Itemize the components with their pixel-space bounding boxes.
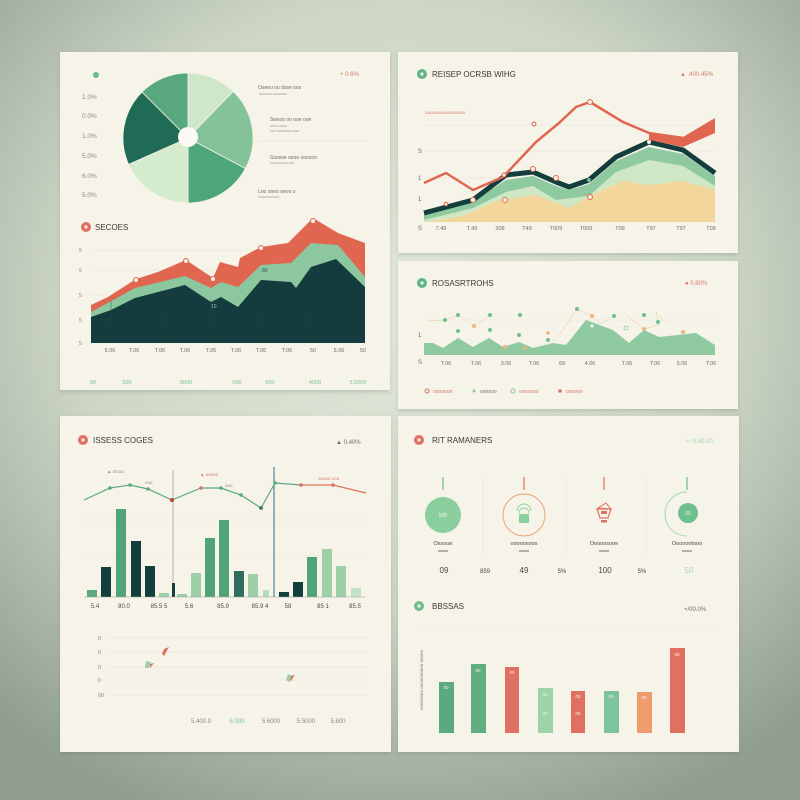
bottom labels: 5.600 <box>330 719 346 725</box>
x labels: 5.06 <box>105 348 115 354</box>
section heading: BBSSAS <box>414 601 464 611</box>
x labels: T97 <box>676 226 686 232</box>
metric numbers: 5% <box>638 569 647 575</box>
heading: ISSESS COGES <box>93 436 153 445</box>
pie legend labels: oooo oooo <box>270 124 287 128</box>
y axis label: oooooooo oooooooooo ooooo <box>419 649 424 710</box>
panel: line and area chart: oooooooooooooooo <box>425 110 466 115</box>
section heading: SECOES <box>81 222 128 232</box>
bottom labels: 5.5000 <box>297 719 316 725</box>
pie y labels: 1.0% <box>82 133 97 140</box>
panel: bar and line combo: ▲ Oooo <box>107 469 124 474</box>
bar x labels <box>91 604 361 610</box>
bar x labels: 85.5 5 <box>151 604 168 610</box>
x labels: T.06 <box>129 348 139 354</box>
pie legend labels: ooooooooooo <box>258 195 279 199</box>
panel: line and area chart: 1 <box>418 176 422 182</box>
metric 1: 505 <box>439 513 447 519</box>
bar x labels: 5.6 <box>185 604 194 610</box>
x labels: T.06 <box>282 348 292 354</box>
pie legend labels: ooooooooo ooo <box>270 161 294 165</box>
top right value: ▲ .400.45% <box>680 72 714 78</box>
top right value: + 0.6% <box>340 72 360 78</box>
y labels area: 5 <box>79 341 82 347</box>
x labels: 50 <box>360 348 366 354</box>
metric numbers <box>440 566 694 575</box>
x labels: 50 <box>310 348 316 354</box>
bottom labels: 5.400.9 <box>191 719 212 725</box>
top right value: ● 0.60% <box>685 281 708 287</box>
top right value: +/ 0.60.00 <box>686 439 714 445</box>
bottom labels: 5.000 <box>229 719 245 725</box>
lower line chart: 0 <box>98 678 101 684</box>
bar chart: 00 <box>608 694 614 699</box>
lower line chart: 0 <box>98 636 101 642</box>
panel: scatter area chart: S <box>418 360 422 366</box>
lower line chart: 00 <box>98 693 104 699</box>
bar x labels: 85 1 <box>317 604 329 610</box>
x labels: T009 <box>580 226 592 232</box>
y labels area: 5 <box>79 248 82 254</box>
pie chart <box>123 73 253 203</box>
stacked area chart <box>91 218 365 343</box>
bar chart: 00 <box>674 652 680 657</box>
bottom green labels: 500 <box>122 380 132 386</box>
markers <box>162 647 169 656</box>
green area <box>424 320 715 355</box>
pie legend labels: ooo ooooooo oooo <box>270 129 299 133</box>
x labels: T.06 <box>529 361 539 367</box>
x labels: T.06 <box>706 361 716 367</box>
pie legend labels: ooooooo ooooooo <box>259 92 287 96</box>
bar x labels: 65.9 4 <box>252 604 269 610</box>
heading <box>414 435 492 445</box>
bottom labels <box>191 719 346 725</box>
y labels area: 5 <box>79 268 82 274</box>
x labels: 4.06 <box>585 361 595 367</box>
x labels <box>441 361 716 367</box>
metric numbers: 859 <box>480 569 491 575</box>
x labels: T97 <box>646 226 656 232</box>
scatter dots <box>427 309 666 346</box>
bottom labels: 5.6000 <box>262 719 281 725</box>
bar chart: 00 <box>475 668 481 673</box>
panel: pie and area chart <box>60 52 390 390</box>
panel: bar and line combo: ooo <box>145 480 153 485</box>
x labels: T09 <box>706 226 716 232</box>
bottom green labels: 600 <box>265 380 275 386</box>
panel: line and area chart: 1 <box>418 197 422 203</box>
pie y labels: 1.0% <box>82 94 97 101</box>
panel: scatter area chart: 1 <box>418 333 422 339</box>
x labels: T.06 <box>471 361 481 367</box>
metric numbers: 100 <box>598 566 612 575</box>
pie y labels: 5.0% <box>82 192 97 199</box>
lower line chart <box>98 636 368 699</box>
metric numbers: 5% <box>558 569 567 575</box>
metric 3 <box>590 477 618 551</box>
metric numbers: 09 <box>440 566 449 575</box>
panel: bar and line combo: ooo <box>225 483 233 488</box>
heading: ROSASRTROHS <box>432 279 494 288</box>
bar chart: 00 <box>509 670 515 675</box>
dark line <box>424 142 715 213</box>
bar x labels: 58 <box>285 604 292 610</box>
bar x labels: 85.5 <box>349 604 361 610</box>
panel: metrics and bars: +/00.0% <box>684 607 707 613</box>
x labels: T.06 <box>622 361 632 367</box>
panel: metrics and bars <box>398 416 739 752</box>
stacked area chart: 10 <box>211 304 217 310</box>
metric 1 <box>425 477 461 551</box>
x labels: 5.06 <box>677 361 687 367</box>
bar x labels: 85.9 <box>217 604 229 610</box>
x labels: T.06 <box>650 361 660 367</box>
pie legend labels: Ssosoe oeoo ooosoo <box>270 155 317 161</box>
lower line chart: 0 <box>98 650 101 656</box>
bar chart: 00 <box>575 694 581 699</box>
pie y labels: 0.0% <box>82 113 97 120</box>
x labels: 7.49 <box>436 226 446 232</box>
bar chart <box>439 648 685 733</box>
panel: bar and line combo: ▲ ooooo <box>200 472 219 477</box>
bottom green labels: 500 <box>232 380 242 386</box>
bar x labels: 80.0 <box>118 604 130 610</box>
bottom green labels: 4000 <box>309 380 321 386</box>
legend: oooooo <box>566 389 583 395</box>
x labels: T.06 <box>180 348 190 354</box>
panel: bar and line combo <box>60 416 391 752</box>
x labels: 309 <box>495 226 505 232</box>
y labels area: 5 <box>79 318 82 324</box>
pie y labels <box>82 94 97 199</box>
bar chart: 00 <box>542 711 548 716</box>
pie legend labels <box>258 85 317 199</box>
x labels: T49 <box>522 226 532 232</box>
x labels <box>436 226 716 232</box>
x labels: 3.06 <box>501 361 511 367</box>
legend: ooooooo <box>519 389 539 395</box>
metric 2 <box>503 477 545 551</box>
x labels: 5.06 <box>334 348 344 354</box>
panel: bar and line combo: ooooo ooo <box>318 476 340 481</box>
heading: REISEP OCRSB WIHG <box>432 70 516 79</box>
panel: scatter area chart <box>398 261 738 409</box>
metric 3: Ooooosooe <box>590 541 618 547</box>
metric 1: Ossoue <box>434 541 452 547</box>
bottom green labels <box>90 380 366 386</box>
x labels: T.06 <box>256 348 266 354</box>
legend <box>425 389 583 395</box>
panel: line and area chart: S <box>418 149 422 155</box>
red line <box>424 102 683 190</box>
bottom green labels: 5.5000 <box>350 380 366 386</box>
metric 4 <box>665 477 702 551</box>
metric 2: ooooosoos <box>511 541 538 547</box>
pie y labels: 6.0% <box>82 173 97 180</box>
x labels: T009 <box>550 226 562 232</box>
bars <box>87 509 361 597</box>
panel: line and area chart: S <box>418 226 422 232</box>
bar x labels: 5.4 <box>91 604 100 610</box>
metric numbers: 50 <box>685 566 694 575</box>
section heading: SECOES: SECOES <box>95 223 128 232</box>
metric 4: Ooooootooo <box>672 541 702 547</box>
y labels area: 5 <box>79 293 82 299</box>
legend: oooooo <box>480 389 497 395</box>
line series <box>84 483 366 508</box>
area layers <box>424 178 715 222</box>
legend: ooooooo <box>433 389 453 395</box>
x labels: 69 <box>559 361 565 367</box>
x labels: T.06 <box>231 348 241 354</box>
stacked area chart: 80 <box>262 268 268 274</box>
pie legend labels: Swsoo oo ooe ooe <box>270 117 312 123</box>
x labels: T.06 <box>155 348 165 354</box>
x labels: T.49 <box>467 226 477 232</box>
bottom green labels: 5000 <box>180 380 192 386</box>
pie legend labels: Oseeu ou dose sos <box>258 85 302 91</box>
top right value: ▲ 0.40% <box>336 440 361 446</box>
x labels <box>105 348 366 354</box>
pie legend labels: Loo ooeo oeoo o <box>258 189 296 195</box>
x labels: T.06 <box>206 348 216 354</box>
metric 4: 00 <box>685 511 691 517</box>
vertical markers <box>172 470 174 597</box>
lower line chart: 0 <box>98 665 101 671</box>
metric numbers: 49 <box>520 566 529 575</box>
section heading: BBSSAS: BBSSAS <box>432 602 464 611</box>
y labels area <box>79 248 82 347</box>
heading: RIT RAMANERS <box>432 436 492 445</box>
bar chart: 00 <box>575 711 581 716</box>
panel: line and area chart <box>398 52 738 253</box>
x labels: T09 <box>615 226 625 232</box>
x labels: T.06 <box>441 361 451 367</box>
icon: green dot <box>93 72 99 78</box>
bar chart: 00 <box>641 695 647 700</box>
bar chart: 00 <box>443 685 449 690</box>
bottom green labels: 90 <box>90 380 96 386</box>
bar chart: 00 <box>542 692 548 697</box>
pie y labels: 5.0% <box>82 153 97 160</box>
